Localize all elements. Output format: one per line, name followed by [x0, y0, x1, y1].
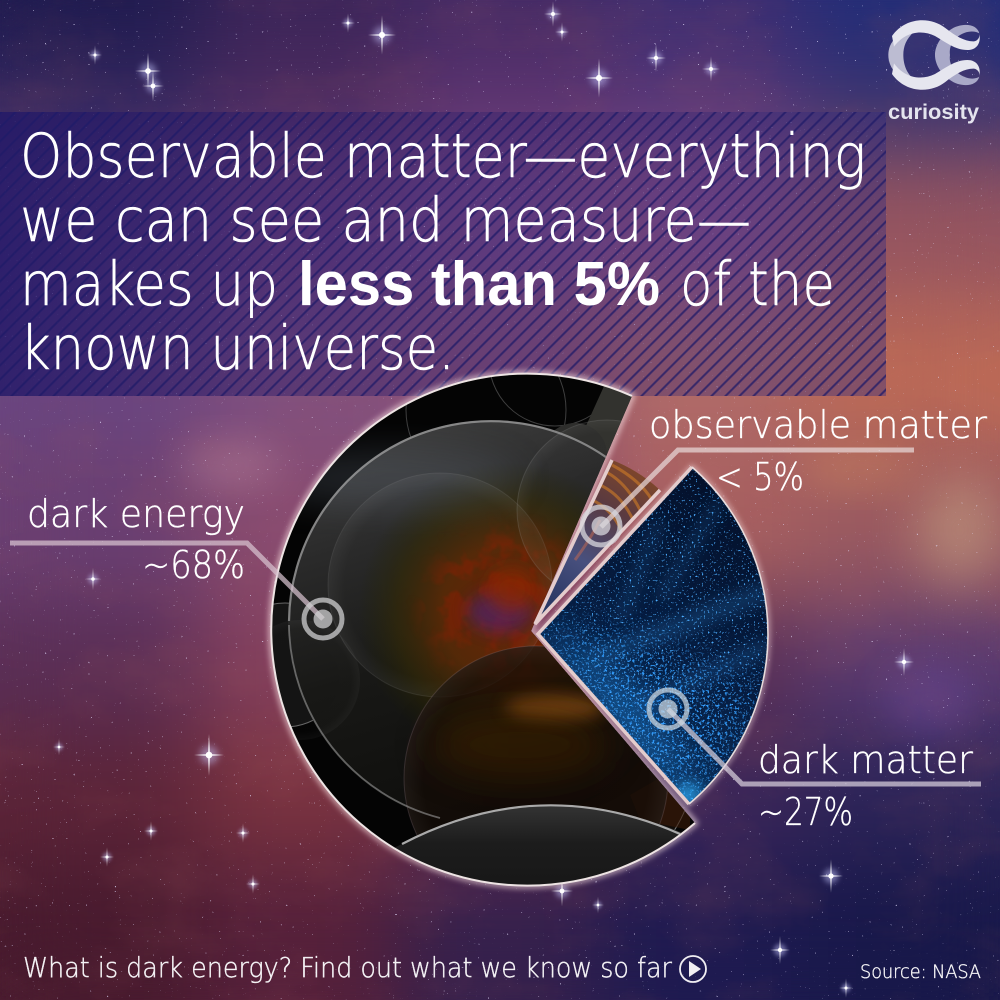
logo: curiosity	[888, 20, 980, 124]
icon: play button	[680, 956, 706, 982]
title	[20, 121, 866, 384]
slice: observable matter	[534, 459, 662, 626]
logo: curiosity: curiosity	[888, 101, 979, 124]
slice: dark matter	[530, 460, 775, 810]
title: Observable matter—everything	[20, 121, 866, 192]
callout: observable matter: observable matter	[649, 403, 987, 447]
callout: observable matter: < 5%	[716, 455, 804, 499]
footer link text: What is dark energy? Find out what we know so far	[23, 951, 672, 984]
pie outline glow	[271, 374, 768, 886]
callout: dark energy	[10, 492, 342, 638]
slice: dark energy edge	[271, 374, 695, 886]
title: we can see and measure—	[20, 185, 751, 256]
title: less than 5%	[298, 250, 660, 319]
source note: Source: NASA	[860, 961, 981, 983]
title: makes up	[20, 249, 278, 320]
callout: dark energy: ~68%	[142, 543, 245, 587]
callout: dark matter: ~27%	[758, 790, 853, 834]
pie chart	[264, 366, 774, 892]
callout: dark matter: dark matter	[758, 738, 973, 782]
callout: observable matter	[582, 403, 987, 545]
slice: dark energy	[272, 374, 695, 885]
callout: dark matter	[649, 690, 981, 834]
banner panel with diagonal stripes	[0, 112, 886, 396]
title: known universe.	[20, 313, 455, 384]
title: of the	[680, 249, 835, 320]
callout: dark energy: dark energy	[27, 492, 245, 536]
